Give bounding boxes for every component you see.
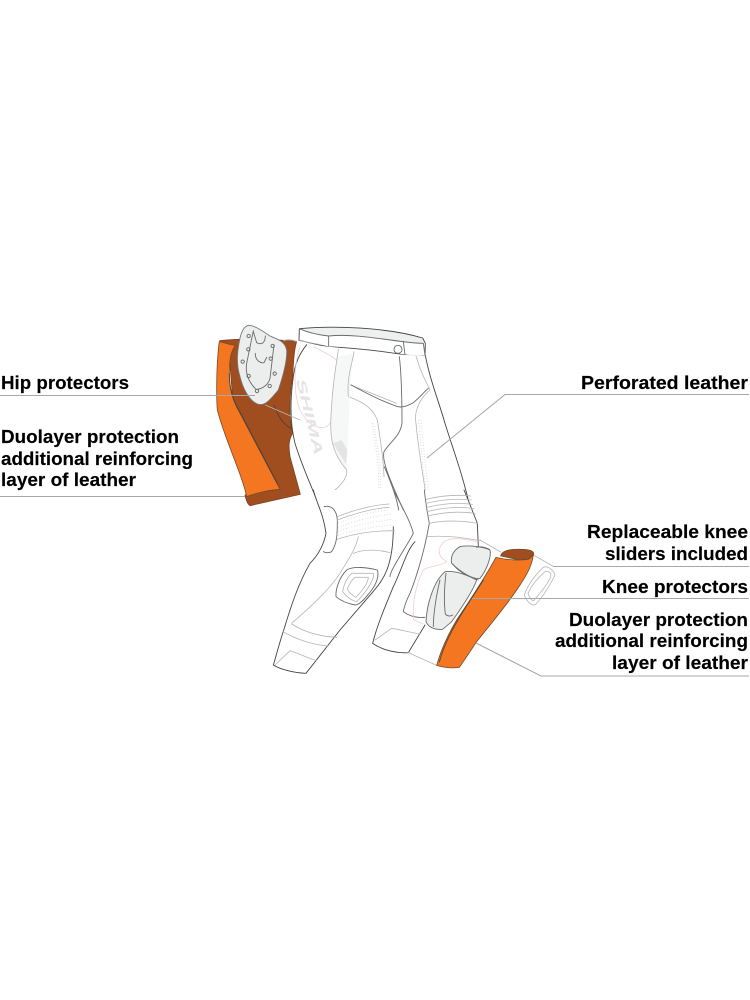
leader line: knee duolayer [476, 643, 749, 676]
label: knee duolayer protection [555, 610, 748, 673]
label: hip protectors: Hip protectors [1, 373, 129, 393]
SHIMA side logo: SHIMA [293, 377, 327, 456]
leader line: hip duolayer [0, 496, 245, 498]
label: knee duolayer protection: additional reinforcing [555, 631, 748, 651]
leader line: knee protectors [472, 598, 749, 600]
upper trouser body [291, 341, 471, 510]
label: hip duolayer protection: layer of leather [1, 470, 136, 490]
hip protector cup [237, 325, 287, 405]
label: hip duolayer protection: additional reinforcing [1, 449, 193, 469]
right lower leg [373, 490, 493, 653]
label: knee duolayer protection: Duolayer protection [569, 610, 748, 630]
label: hip duolayer protection [1, 427, 193, 490]
label: replaceable knee sliders: sliders included [605, 544, 748, 564]
knee protector cups [451, 546, 490, 579]
orange outer leather [437, 554, 533, 668]
label: knee duolayer protection: layer of leather [612, 653, 748, 673]
label: knee protectors: Knee protectors [602, 577, 748, 597]
trousers line illustration [273, 327, 555, 673]
label: perforated leather: Perforated leather [581, 373, 748, 393]
label: replaceable knee sliders [587, 522, 748, 564]
waistband [299, 327, 425, 356]
label: replaceable knee sliders: Replaceable knee [587, 522, 748, 542]
brown inner leather [220, 339, 300, 506]
leader line: hip protectors [0, 394, 255, 396]
lower legs and knee panels [273, 490, 555, 673]
label: hip duolayer protection: Duolayer protection [1, 427, 179, 447]
knee duolayer reinforcing layer [437, 549, 534, 668]
outer knee slider [480, 540, 553, 599]
orange outer leather [217, 341, 280, 497]
leader line: perforated leather [427, 394, 749, 458]
hip duolayer reinforcing layer [217, 325, 300, 506]
brown inner leather [501, 549, 534, 559]
leader line: replaceable knee sliders [553, 566, 749, 568]
